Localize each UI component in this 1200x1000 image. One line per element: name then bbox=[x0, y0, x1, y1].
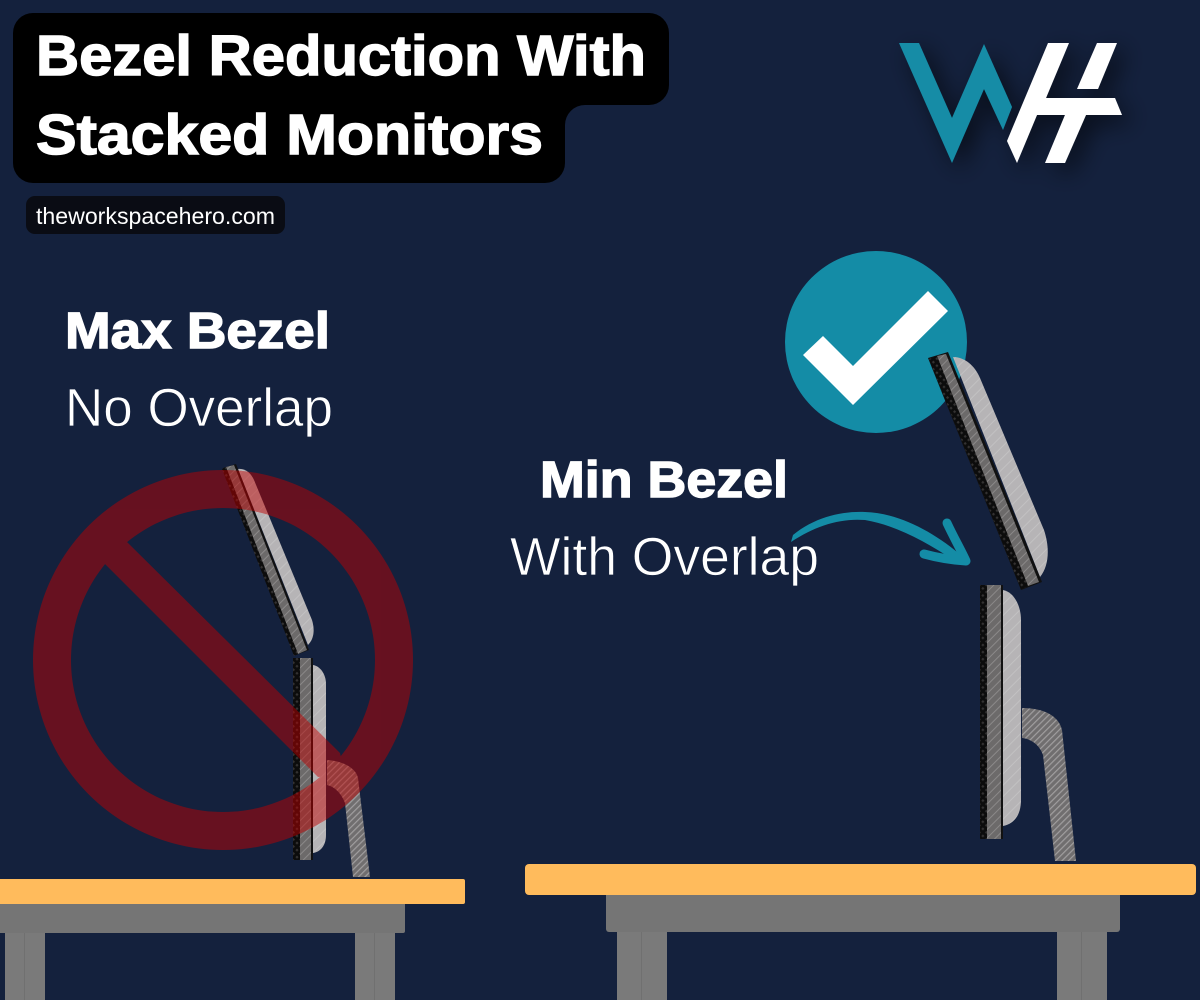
upper monitor bbox=[222, 464, 314, 656]
stand bbox=[1022, 708, 1076, 861]
heading: min bezel bbox=[510, 451, 819, 587]
heading: max bezel: No Overlap bbox=[65, 378, 333, 438]
left monitor stack bbox=[222, 464, 370, 877]
right desk bbox=[525, 864, 1196, 1000]
right monitor stack bbox=[928, 352, 1076, 861]
lower monitor bbox=[980, 585, 1021, 839]
logo bbox=[899, 43, 1122, 163]
title: Bezel Reduction With bbox=[36, 24, 646, 88]
left desk bbox=[0, 879, 465, 1000]
heading: min bezel: Min Bezel bbox=[540, 451, 788, 508]
upper monitor bbox=[928, 352, 1048, 590]
website label bbox=[26, 196, 285, 234]
title bbox=[13, 13, 669, 183]
website label: theworkspacehero.com bbox=[36, 203, 275, 229]
prohibition sign bbox=[33, 470, 413, 850]
check badge bbox=[785, 251, 967, 433]
heading: min bezel: With Overlap bbox=[510, 527, 819, 587]
heading: max bezel bbox=[65, 302, 333, 438]
stand bbox=[327, 760, 370, 877]
lower monitor bbox=[293, 658, 326, 860]
heading: max bezel: Max Bezel bbox=[65, 302, 330, 359]
title: Stacked Monitors bbox=[36, 103, 543, 167]
arrow bbox=[791, 512, 966, 561]
